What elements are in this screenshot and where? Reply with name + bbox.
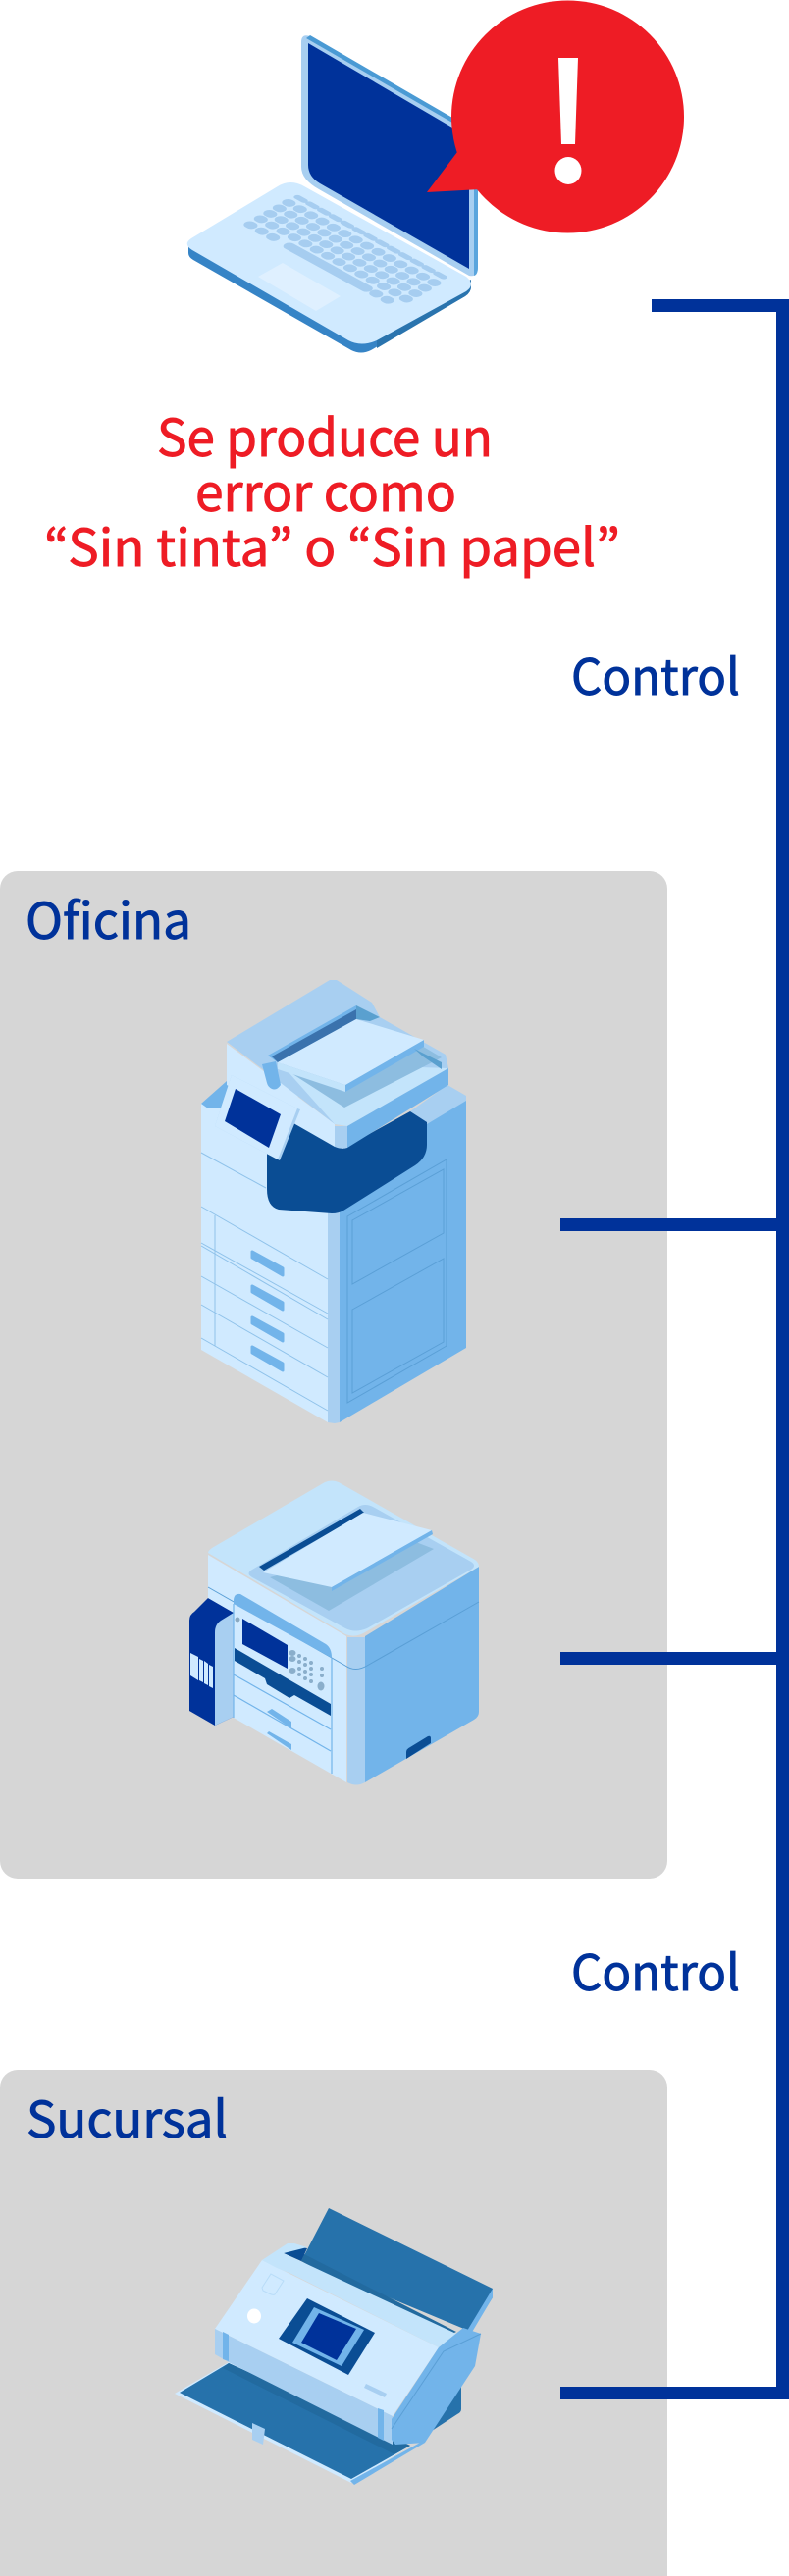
- dark output band: [235, 1648, 331, 1716]
- model label: [364, 2384, 387, 2397]
- panel: Sucursal: [0, 2070, 667, 2576]
- printer front: [208, 1555, 346, 1782]
- side handle: [406, 1736, 431, 1759]
- printer top: [208, 1481, 479, 1636]
- rear paper support: [301, 2208, 493, 2332]
- output cavity: [267, 1111, 427, 1213]
- scanner unit: [227, 980, 448, 1126]
- control panel: [215, 1075, 300, 1160]
- front paper tray: [175, 2362, 410, 2483]
- heading: Oficina: Oficina: [26, 881, 191, 953]
- ink tank: [189, 1598, 234, 1726]
- error message: “Sin tinta” o “Sin papel”: [44, 507, 620, 581]
- icon: large office multifunction printer: [201, 980, 466, 1423]
- icon: document scanner: [175, 2208, 493, 2485]
- document feeder tray: [278, 1019, 424, 1085]
- exclamation mark: [555, 58, 581, 184]
- error message: error como: [195, 452, 456, 526]
- scanner body: [215, 2260, 439, 2416]
- side cover: [392, 2328, 481, 2445]
- keypad buttons: [289, 1650, 324, 1691]
- label: Control (bottom): Control: [571, 1934, 740, 2005]
- keyboard: [250, 197, 447, 306]
- touchpad: [258, 263, 341, 311]
- label: Control (top): Control: [571, 639, 740, 709]
- heading: Sucursal: Sucursal: [26, 2080, 228, 2152]
- icon: error speech bubble: [427, 0, 684, 233]
- icon: compact ink tank printer: [189, 1481, 479, 1785]
- paper tray handles: [267, 1709, 291, 1750]
- error message: Se produce un: [157, 397, 493, 471]
- error message: [44, 397, 620, 581]
- icon: laptop: [187, 35, 478, 353]
- side door lines: [347, 1159, 447, 1403]
- paper guide: [262, 2274, 284, 2294]
- power button: [247, 2309, 261, 2323]
- scanner screen: [279, 2298, 375, 2375]
- control panel band: [234, 1594, 332, 1658]
- printer side: [365, 1567, 479, 1782]
- front panel lines: [201, 1153, 328, 1411]
- rear stand: [412, 2387, 461, 2431]
- connector lines: [560, 299, 789, 2399]
- panel: Oficina: [0, 871, 667, 1879]
- paper drawer handles: [252, 1252, 283, 1370]
